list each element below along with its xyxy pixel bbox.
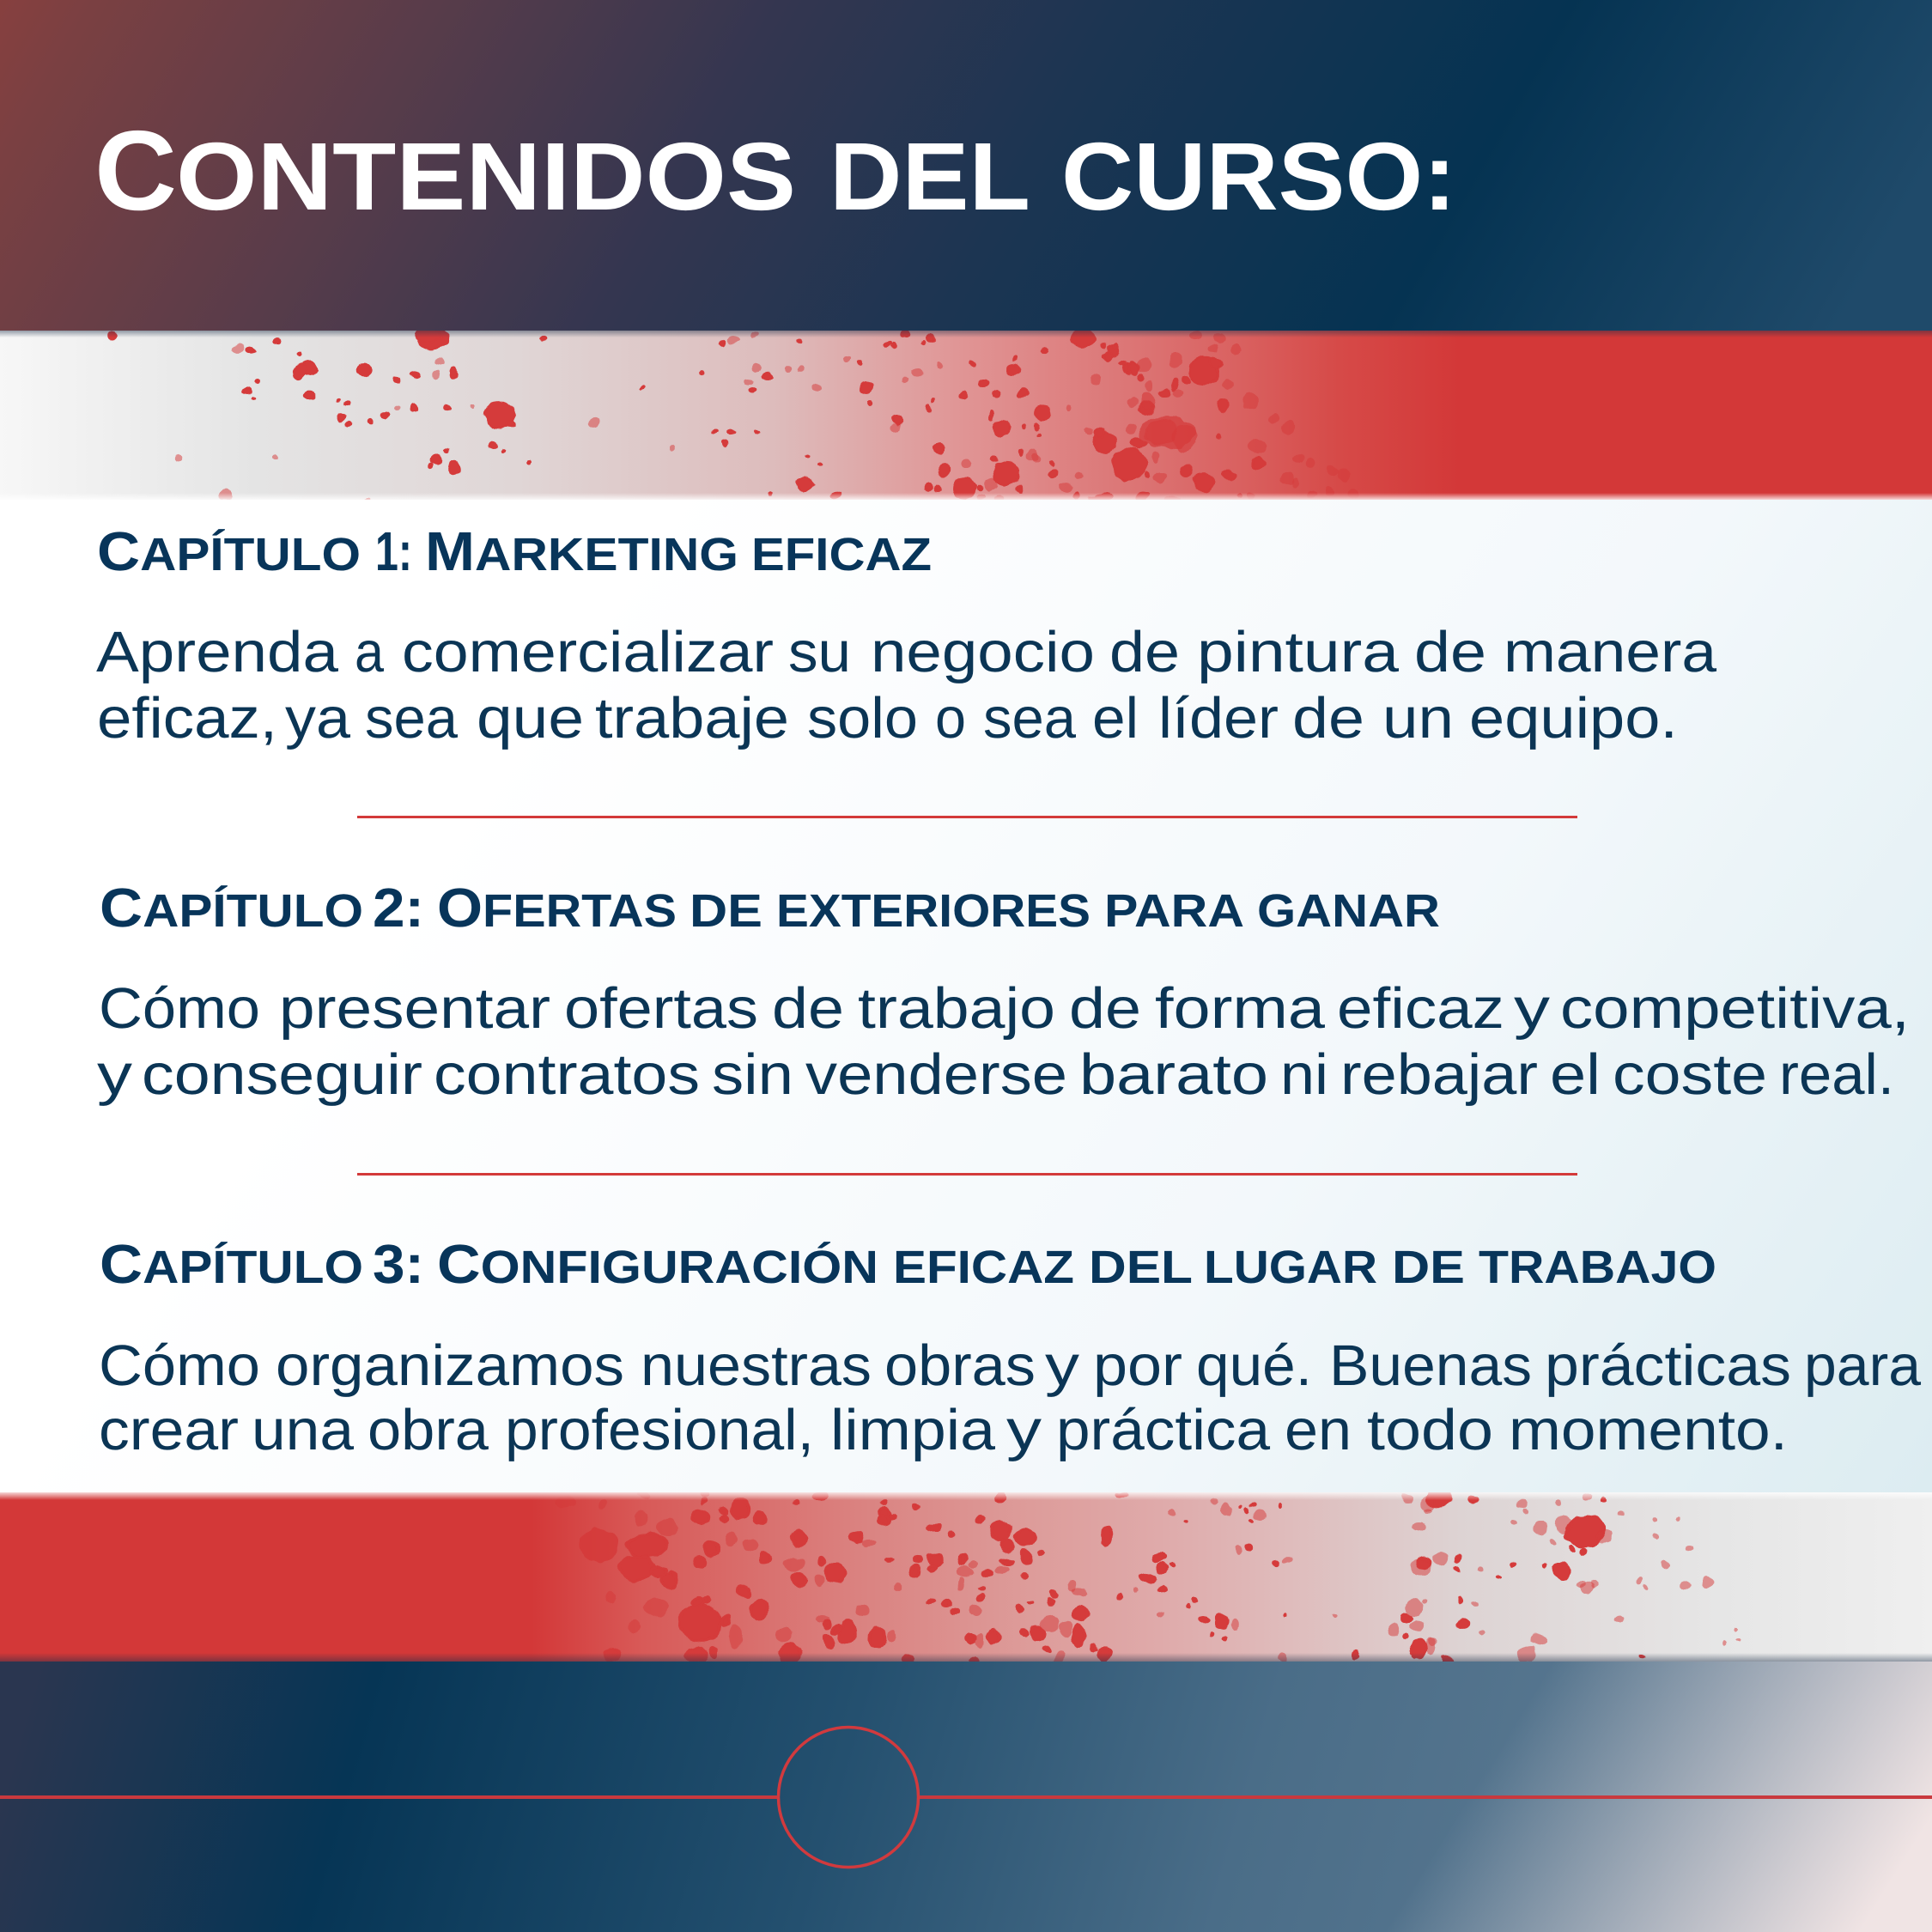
band gradient xyxy=(0,331,1932,500)
body chapter 3: limpia xyxy=(830,1398,996,1462)
panel: upper splatter band xyxy=(0,325,1932,501)
heading chapter 3: CONFIGURACIÓN xyxy=(437,1233,844,1295)
body chapter 1: sea xyxy=(365,686,459,750)
body chapter 1: trabaje xyxy=(595,686,789,750)
body chapter 3: todo xyxy=(1367,1398,1493,1462)
heading chapter 1: EFICAZ xyxy=(751,529,932,580)
panel: content background xyxy=(0,500,1932,1492)
body chapter 1: equipo. xyxy=(1469,686,1678,750)
heading chapter 1: MARKETING xyxy=(425,520,717,582)
body chapter 2: de xyxy=(1069,976,1141,1041)
panel: footer xyxy=(0,1662,1932,1932)
body chapter 3: qué. xyxy=(1196,1334,1312,1398)
body chapter 1: su xyxy=(788,620,851,684)
body chapter 2: sin xyxy=(712,1042,793,1107)
body chapter 1: el xyxy=(1092,686,1139,750)
body chapter 1: manera xyxy=(1504,620,1717,684)
body chapter 1: comercializar xyxy=(402,620,774,684)
body chapter 1: Aprenda xyxy=(96,620,339,684)
body chapter 3: práctica xyxy=(1056,1398,1271,1462)
body chapter 1: pintura xyxy=(1197,620,1400,684)
body chapter 3: momento. xyxy=(1509,1398,1788,1462)
body chapter 3: profesional, xyxy=(505,1398,814,1462)
body chapter 2: ofertas xyxy=(564,976,758,1041)
body chapter 1: negocio xyxy=(871,620,1095,684)
heading chapter 3: DE xyxy=(1392,1242,1465,1293)
body chapter 3: crear xyxy=(99,1398,239,1462)
body chapter 3: una xyxy=(252,1398,355,1462)
body chapter 2: y xyxy=(97,1042,133,1107)
body chapter 2: contratos xyxy=(434,1042,700,1107)
band bottom shadow xyxy=(0,1653,1932,1662)
heading chapter 2: CAPÍTULO xyxy=(100,877,346,939)
divider 2 xyxy=(357,1173,1577,1176)
body chapter 2: de xyxy=(772,976,844,1041)
footer background xyxy=(0,1662,1932,1932)
body chapter 3: obras xyxy=(884,1334,1036,1398)
section: chapter 2 xyxy=(97,877,1926,1107)
footer light corner xyxy=(0,1662,1932,1932)
body chapter 2: forma xyxy=(1155,976,1326,1041)
body chapter 2: competitiva, xyxy=(1560,976,1910,1041)
body chapter 1: o xyxy=(935,686,966,750)
body chapter 3: organizamos xyxy=(276,1334,624,1398)
band top shadow xyxy=(0,331,1932,337)
heading chapter 1: 1: xyxy=(375,520,412,582)
band bottom fade xyxy=(0,493,1932,500)
title: CURSO: xyxy=(1061,123,1456,230)
paint splatter left xyxy=(108,325,850,501)
heading chapter 2: 2: xyxy=(373,877,424,939)
body chapter 1: líder xyxy=(1158,686,1279,750)
body chapter 3: nuestras xyxy=(641,1334,872,1398)
heading chapter 3: LUGAR xyxy=(1204,1242,1377,1293)
body chapter 1: eficaz, xyxy=(97,686,277,750)
body chapter 1: de xyxy=(1414,620,1486,684)
body chapter 2: Cómo xyxy=(99,976,260,1041)
body chapter 3: prácticas xyxy=(1545,1334,1791,1398)
heading chapter 3: TRABAJO xyxy=(1479,1242,1716,1293)
heading chapter 2: EXTERIORES xyxy=(776,885,1091,937)
heading chapter 3: EFICAZ xyxy=(893,1242,1074,1293)
body chapter 1: de xyxy=(1109,620,1180,684)
body chapter 3: Cómo xyxy=(99,1334,260,1398)
band gradient xyxy=(0,1492,1932,1662)
title: ONTENIDOS xyxy=(176,123,796,230)
title: C xyxy=(94,107,177,234)
body chapter 1: sea xyxy=(983,686,1077,750)
heading chapter 1: CAPÍTULO xyxy=(97,520,343,582)
body chapter 3: por xyxy=(1093,1334,1182,1398)
body chapter 3: para xyxy=(1804,1334,1922,1398)
body chapter 2: conseguir xyxy=(142,1042,422,1107)
heading chapter 3: 3: xyxy=(373,1233,424,1295)
footer line left xyxy=(0,1795,779,1799)
body chapter 1: de xyxy=(1292,686,1364,750)
paint splatter right xyxy=(1115,1487,1740,1662)
body chapter 2: coste xyxy=(1613,1042,1767,1107)
band top fade xyxy=(0,1492,1932,1500)
body chapter 3: en xyxy=(1285,1398,1352,1462)
footer circle xyxy=(778,1728,919,1867)
body chapter 3: y xyxy=(1045,1334,1080,1398)
body chapter 2: barato xyxy=(1079,1042,1268,1107)
title: DEL xyxy=(829,123,1030,230)
body chapter 3: Buenas xyxy=(1329,1334,1532,1398)
body chapter 2: trabajo xyxy=(858,976,1055,1041)
body chapter 1: un xyxy=(1382,686,1454,750)
section: chapter 1 xyxy=(96,520,1733,750)
heading chapter 3: DEL xyxy=(1089,1242,1193,1293)
body chapter 3: obra xyxy=(368,1398,489,1462)
paint splatter left xyxy=(556,1492,1111,1663)
body chapter 1: ya xyxy=(285,686,351,750)
body chapter 2: presentar xyxy=(279,976,550,1041)
body chapter 3: y xyxy=(1006,1398,1042,1462)
body chapter 2: venderse xyxy=(805,1042,1067,1107)
footer line right xyxy=(918,1795,1932,1799)
body chapter 1: que xyxy=(477,686,584,750)
heading chapter 2: GANAR xyxy=(1257,885,1440,937)
body chapter 2: el xyxy=(1550,1042,1601,1107)
body chapter 2: y xyxy=(1514,976,1551,1041)
heading chapter 2: OFERTAS xyxy=(437,877,665,939)
heading chapter 3: CAPÍTULO xyxy=(100,1233,346,1295)
panel: header xyxy=(0,0,1932,331)
heading chapter 2: PARA xyxy=(1104,885,1244,937)
section: chapter 3 xyxy=(99,1233,1932,1462)
panel: lower splatter band xyxy=(0,1487,1932,1663)
body chapter 2: rebajar xyxy=(1340,1042,1538,1107)
paint splatter right xyxy=(859,329,1358,501)
body chapter 2: ni xyxy=(1280,1042,1328,1107)
body chapter 1: a xyxy=(355,620,385,684)
header background xyxy=(0,0,1932,331)
body chapter 1: solo xyxy=(807,686,918,750)
body chapter 2: real. xyxy=(1779,1042,1894,1107)
divider 1 xyxy=(357,816,1577,818)
heading chapter 2: DE xyxy=(690,885,762,937)
body chapter 2: eficaz xyxy=(1337,976,1504,1041)
